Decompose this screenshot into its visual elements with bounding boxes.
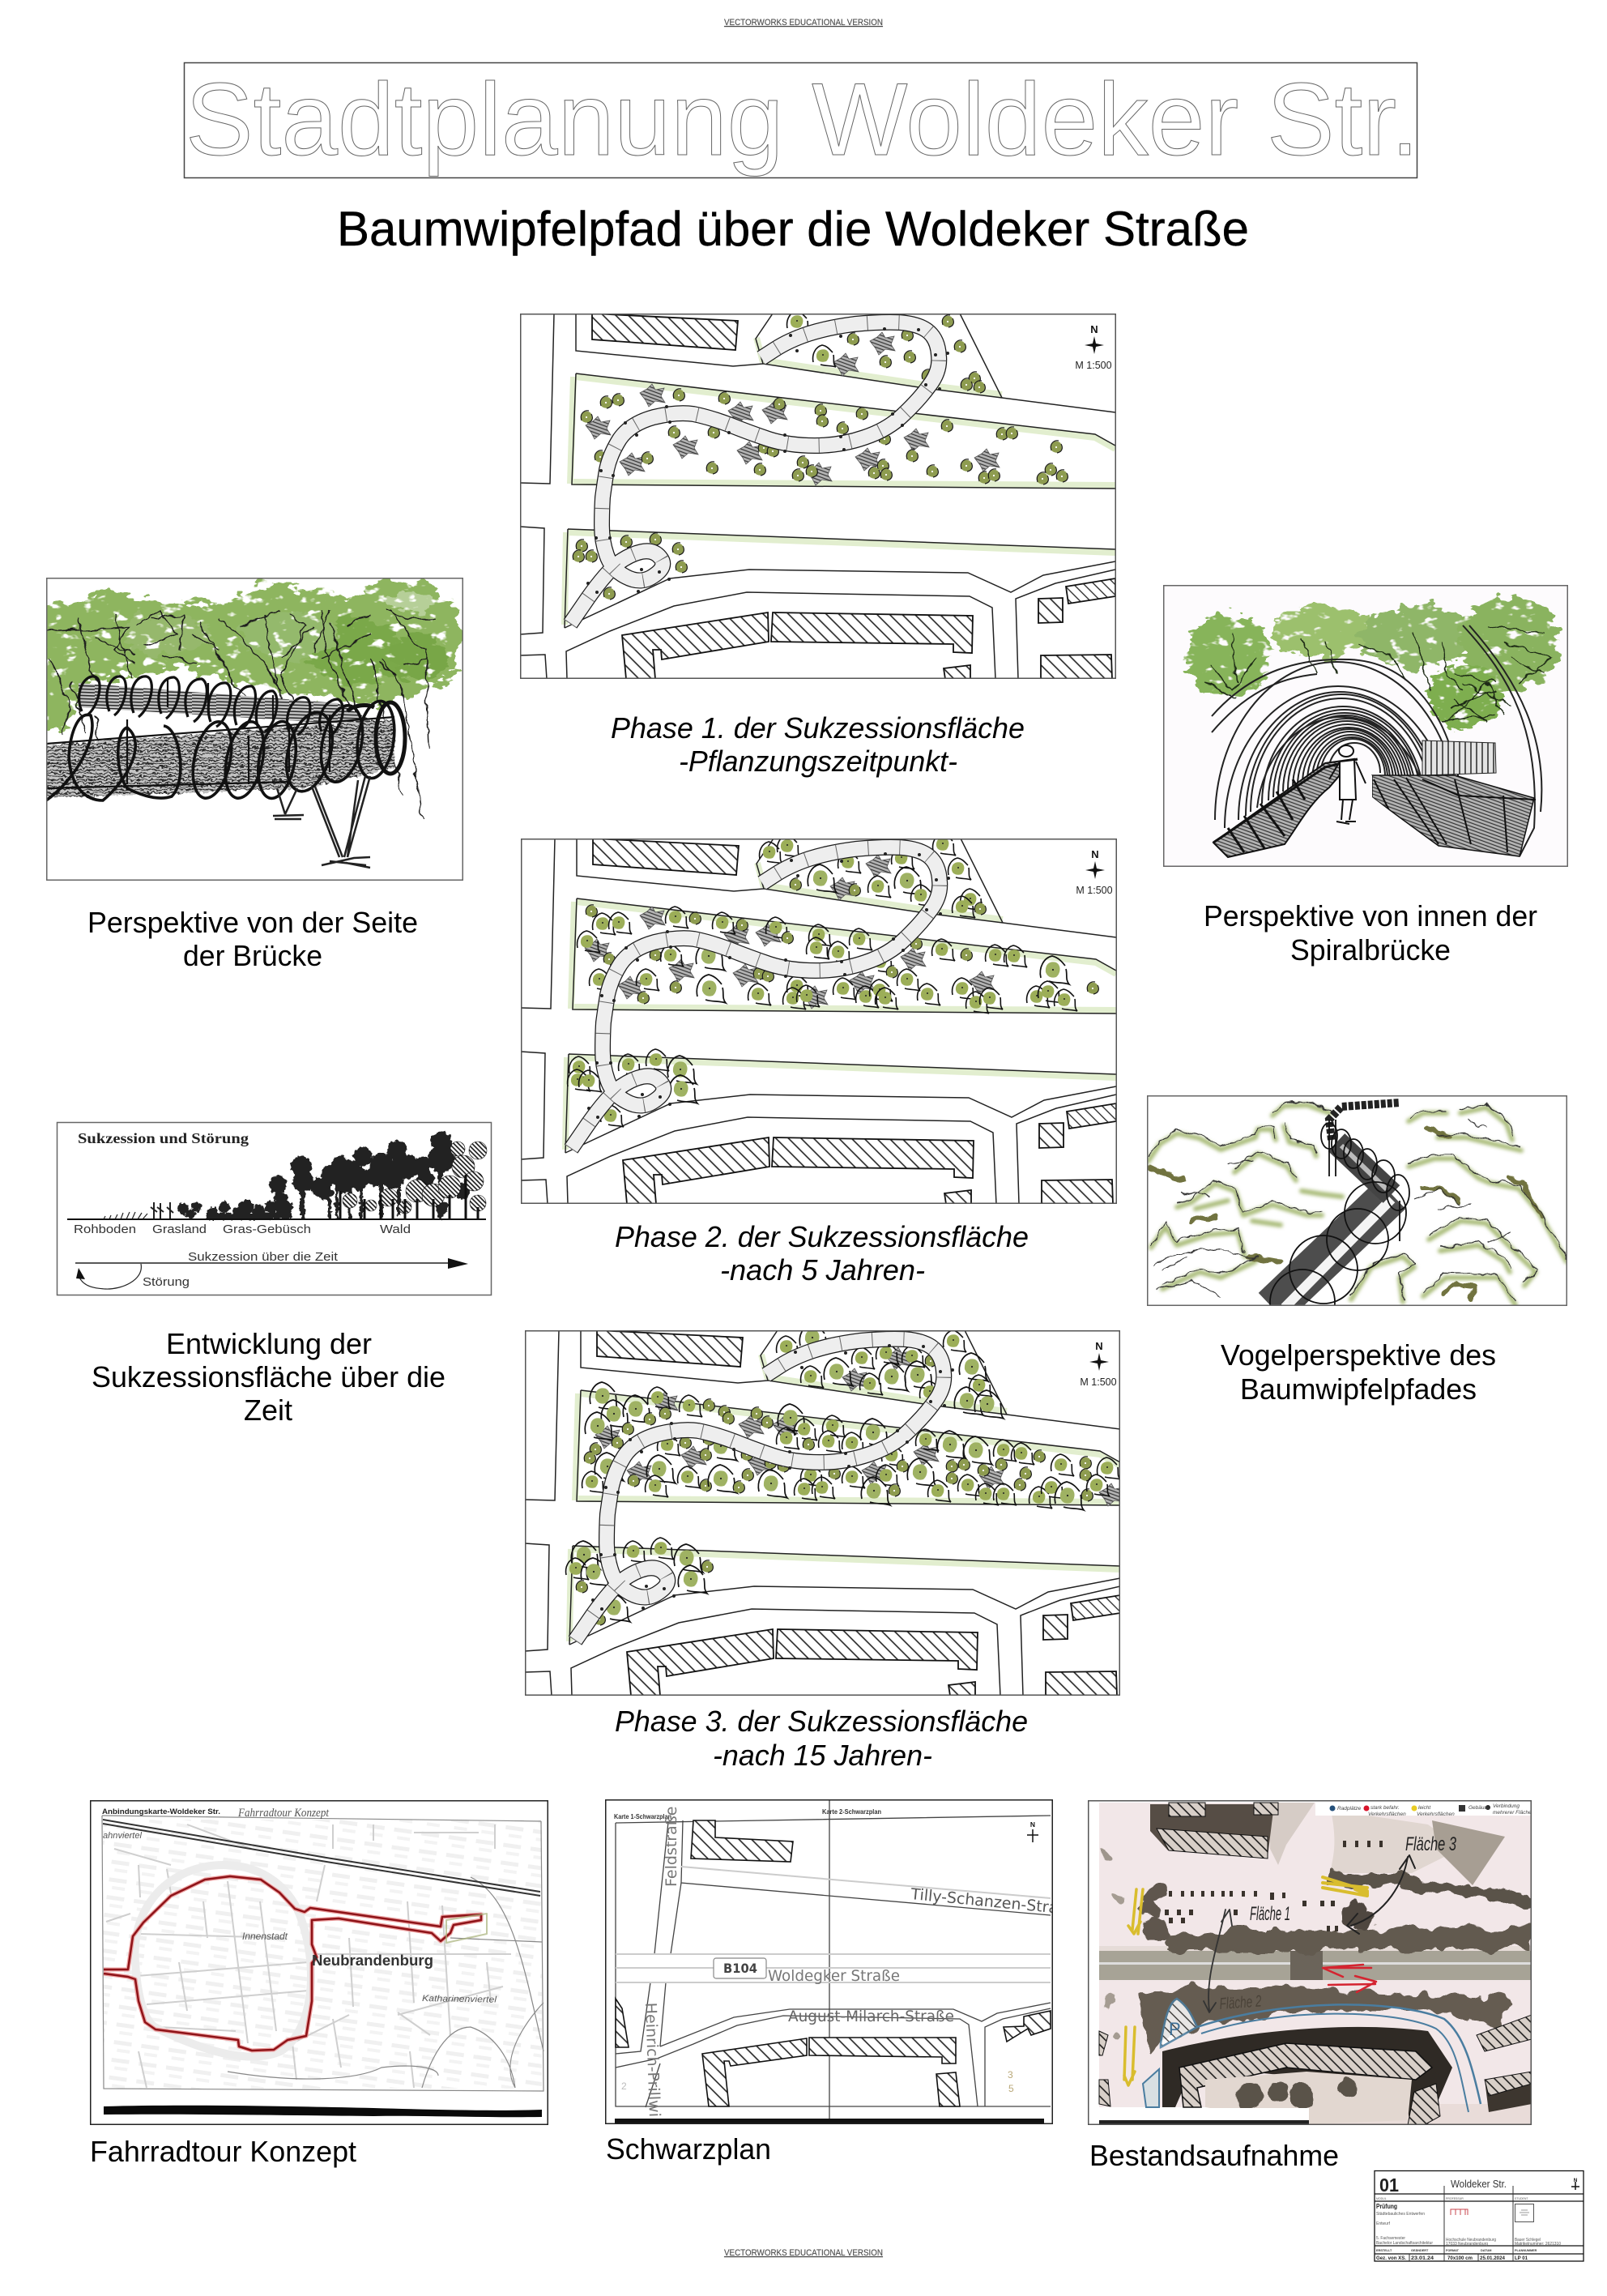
- map labels: N: [1030, 1820, 1035, 1829]
- spiral loops lower: [46, 698, 405, 802]
- watermark top: VECTORWORKS EDUCATIONAL VERSION: [724, 18, 883, 28]
- handwritten labels: Fläche 1: [1250, 1903, 1290, 1925]
- caption: site survey: Bestandsaufnahme: [1089, 2139, 1339, 2172]
- panel: site survey aerial: [1088, 1800, 1535, 2125]
- title block: Prüfung: [1376, 2203, 1397, 2210]
- title block: 17033 Neubrandenburg: [1446, 2242, 1488, 2247]
- title block: PROFESSUR: [1446, 2197, 1464, 2200]
- spiral loops upper: [79, 676, 374, 736]
- footer bar: [104, 2106, 542, 2117]
- tree branches: [1204, 625, 1552, 723]
- panel: side perspective of the bridge: [46, 578, 463, 881]
- caption: side perspective: Perspektive von der Seite: [87, 906, 418, 939]
- caption: succession: [92, 1327, 445, 1427]
- map labels: Tilly-Schanzen-Straße: [910, 1885, 1078, 1919]
- caption: bird's eye: Baumwipfelpfades: [1240, 1372, 1477, 1406]
- title block: Gez. von XS.: [1376, 2255, 1406, 2261]
- right railing: [1372, 775, 1534, 856]
- subtitle: Baumwipfelpfad über die Woldeker Straße: [337, 202, 1249, 256]
- tree top walkway tube: [1270, 1103, 1409, 1334]
- title box: Stadtplanung Woldeker Str.: [185, 62, 1419, 177]
- lower dark courtyard: [1162, 2027, 1452, 2124]
- roads: [616, 1799, 1051, 2124]
- caption: figure ground: Schwarzplan: [606, 2132, 771, 2166]
- panel: phase 2 plan: [521, 839, 1117, 1204]
- railway: [103, 1820, 540, 1896]
- stars and trees phase 2: [568, 834, 1098, 1127]
- panel: succession diagram: Störung: [143, 1276, 190, 1289]
- caption phase 1: Phase 1. der Sukzessionsfläche: [611, 711, 1025, 745]
- title block: PLANNUMMER: [1515, 2249, 1537, 2252]
- buildings: [616, 1820, 1051, 2106]
- map labels: 3: [1008, 2069, 1013, 2080]
- tree silhouettes: [67, 1132, 487, 1220]
- aerial photo: [1099, 1803, 1532, 2125]
- panel: succession diagram: Sukzession über die Zeit: [188, 1251, 338, 1264]
- caption: bicycle tour: Fahrradtour Konzept: [90, 2135, 356, 2168]
- inner yard: [1205, 2072, 1412, 2124]
- caption phase 3: Phase 3. der Sukzessionsfläche: [615, 1705, 1028, 1738]
- caption phase 2: -nach 5 Jahren-: [720, 1253, 925, 1287]
- panel: succession diagram: Wald: [380, 1223, 411, 1236]
- title block: 5. Fachsemester: [1376, 2236, 1405, 2241]
- caption: succession: Entwicklung der: [166, 1327, 372, 1360]
- panel: succession diagram: Grasland: [152, 1223, 207, 1236]
- legend strip: Gebäude: [1468, 1805, 1490, 1811]
- title block: Woldeker Str.: [1451, 2178, 1507, 2190]
- title block: Hochschule Neubrandenburg: [1446, 2238, 1496, 2243]
- map labels: [614, 1807, 1078, 2117]
- foliage: [30, 579, 462, 732]
- map labels: Anbindungskarte-Woldeker Str.: [102, 1807, 220, 1816]
- panel: succession diagram: Sukzession und Störung: [78, 1130, 249, 1146]
- map labels: August-Milarch-Straße: [788, 2008, 954, 2025]
- caption phase 1: -Pflanzungszeitpunkt-: [679, 745, 957, 778]
- title block: LP 01: [1515, 2255, 1528, 2261]
- route: [104, 1876, 487, 2051]
- road band: [1099, 1951, 1532, 1980]
- floor: [1285, 775, 1443, 867]
- legend strip: leicht: [1418, 1805, 1431, 1811]
- caption: bird's eye: [1221, 1338, 1496, 1406]
- map labels: Neubrandenburg: [312, 1952, 433, 1969]
- panel: succession diagram: [57, 1123, 491, 1295]
- scale footer: [1099, 2108, 1309, 2120]
- handwritten labels: [1169, 1833, 1456, 2039]
- support legs and footing: [273, 776, 370, 868]
- east buildings: [1477, 2015, 1532, 2051]
- upper tube: [79, 683, 370, 732]
- panel: interior perspective: [1163, 585, 1568, 867]
- title block: Städtebauliches Entwerfen: [1376, 2212, 1425, 2217]
- title block: 25.01.2024: [1480, 2255, 1505, 2261]
- title block: ERSTELLT: [1376, 2249, 1392, 2252]
- panel: bird's eye view: [1147, 1095, 1567, 1306]
- caption: interior perspective: Spiralbrücke: [1290, 933, 1451, 967]
- foliage shading: [1148, 1105, 1567, 1305]
- thick dark olive strokes: [1151, 1128, 1541, 1299]
- caption phase 3: [615, 1705, 1028, 1772]
- legend strip: stark befahr.: [1370, 1805, 1400, 1811]
- caption phase 3: -nach 15 Jahren-: [713, 1739, 932, 1772]
- caption phase 1: [611, 711, 1025, 778]
- panel: bicycle tour map: [90, 1800, 548, 2125]
- map labels: Fahrradtour Konzept: [237, 1807, 330, 1820]
- map labels: [102, 1807, 497, 2005]
- legend strip: Verkehrsflächen: [1368, 1812, 1406, 1817]
- legend strip: Verkehrsflächen: [1417, 1812, 1455, 1817]
- panel: succession diagram: Gras-Gebüsch: [223, 1223, 311, 1236]
- stars and trees phase 3: [566, 1324, 1124, 1625]
- caption: side perspective: der Brücke: [183, 939, 322, 972]
- handwritten labels: Fläche 2: [1219, 1992, 1262, 2013]
- foliage: [1186, 596, 1560, 729]
- map labels: Heinrich-Prillwi: [642, 2002, 663, 2117]
- map labels: Woldegker Straße: [768, 1967, 900, 1985]
- upper right sand area: [1331, 1810, 1460, 1873]
- stars and trees phase 1: [573, 311, 1068, 600]
- lower parking outlines: [1161, 1999, 1197, 2047]
- panel: phase 1 plan: [520, 314, 1116, 679]
- title block: GEÄNDERT: [1411, 2249, 1429, 2252]
- arrows: [75, 1258, 468, 1289]
- caption phase 2: Phase 2. der Sukzessionsfläche: [615, 1220, 1029, 1253]
- caption: interior perspective: Perspektive von innen der: [1204, 899, 1537, 932]
- handwritten labels: P: [1169, 2019, 1181, 2039]
- outer spiral arcs: [1212, 625, 1541, 856]
- title block: 23.01.24: [1411, 2255, 1434, 2261]
- title block: [1375, 2171, 1584, 2261]
- tree branches: [46, 610, 435, 821]
- caption: interior perspective: [1204, 899, 1537, 967]
- watermark bottom: VECTORWORKS EDUCATIONAL VERSION: [724, 2248, 883, 2258]
- person: [1329, 745, 1366, 824]
- lower tube: [46, 719, 394, 798]
- title block: N: [1574, 2179, 1577, 2183]
- base map streets: [102, 1816, 543, 2091]
- title block: Entwurf: [1376, 2221, 1390, 2226]
- title block: DATUM: [1481, 2249, 1491, 2252]
- map labels: B104: [723, 1961, 757, 1976]
- title block: FORMAT: [1446, 2249, 1460, 2252]
- title block: 70x100 cm: [1447, 2255, 1473, 2261]
- map labels: Karte 2-Schwarzplan: [822, 1808, 881, 1816]
- map labels: Feldstraße: [663, 1807, 680, 1887]
- panel: figure ground plan: [605, 1799, 1078, 2124]
- top buildings: [1150, 1804, 1274, 1857]
- title block: STUDENT: [1515, 2197, 1528, 2200]
- contour lines: [1148, 1102, 1567, 1302]
- caption: side perspective: [87, 906, 418, 972]
- left railing: [1213, 759, 1353, 857]
- panel: succession diagram: Rohboden: [74, 1223, 136, 1236]
- footer bar: [615, 2119, 1044, 2123]
- distant tube: [1422, 740, 1496, 775]
- caption: succession: Sukzessionsfläche über die: [92, 1360, 445, 1393]
- handwritten labels: Fläche 3: [1405, 1833, 1456, 1855]
- caption: bird's eye: Vogelperspektive des: [1221, 1338, 1496, 1372]
- survey arrows: [1124, 1855, 1415, 2085]
- title block: 01: [1379, 2174, 1399, 2196]
- title block: Matrikelnummer: 2621310: [1515, 2242, 1561, 2247]
- legend strip: Verbindung: [1493, 1803, 1520, 1809]
- caption phase 2: [615, 1220, 1029, 1287]
- title block: Bauer Schlegel: [1515, 2238, 1541, 2243]
- parked cars: [1165, 1841, 1383, 1931]
- map labels: Karte 1-Schwarzplan: [614, 1813, 671, 1820]
- title block: MODUL: [1376, 2197, 1387, 2200]
- map labels: Innenstadt: [242, 1932, 288, 1942]
- map labels: 5: [1008, 2083, 1014, 2094]
- legend strip: [1315, 1800, 1535, 1817]
- map labels: ahnviertel: [103, 1831, 143, 1841]
- vegetation bands: [1099, 1852, 1531, 2051]
- hatched block: [1179, 2043, 1432, 2107]
- map labels: Katharinenviertel: [422, 1994, 497, 2005]
- panel: phase 3 plan: [525, 1330, 1120, 1696]
- legend strip: mehrerer Flächen: [1493, 1810, 1535, 1816]
- legend strip: Radplätze: [1337, 1806, 1362, 1812]
- title block: Bachelor Landschaftsarchitektur: [1376, 2241, 1433, 2246]
- map labels: 2: [621, 2080, 627, 2092]
- caption: succession: Zeit: [244, 1393, 292, 1427]
